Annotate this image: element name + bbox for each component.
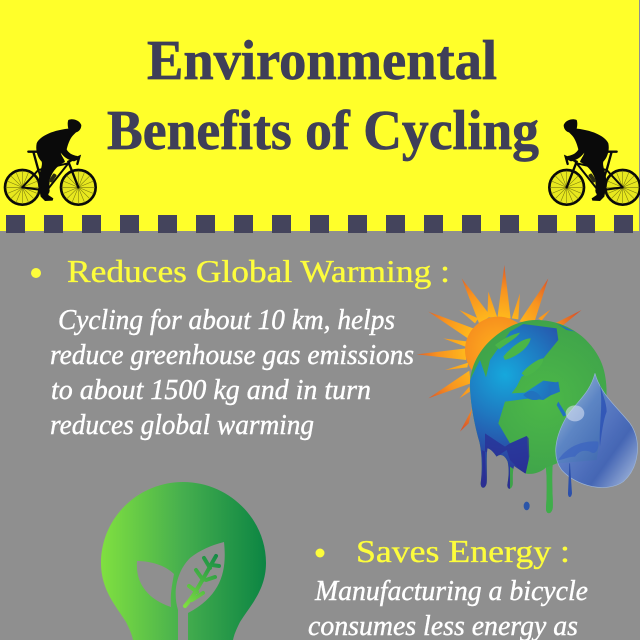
icon: left cyclist <box>5 119 96 205</box>
melting globe body <box>467 317 610 520</box>
detached drip <box>524 502 530 510</box>
icon: green light bulb with leaves <box>101 482 266 640</box>
text block: global warming description: reduces global warming <box>50 410 314 441</box>
sun rays <box>417 265 582 432</box>
title: Environmental <box>147 30 497 92</box>
icon: right cyclist <box>549 119 640 205</box>
text block: global warming description: to about 1500 kg and in turn <box>51 375 371 406</box>
yellow header band <box>0 0 639 231</box>
drop refraction <box>600 383 607 447</box>
water drop <box>556 373 637 488</box>
checkered road strip <box>6 215 633 233</box>
heading: saves energy: Saves Energy : <box>356 533 570 569</box>
left leaf <box>137 561 174 607</box>
heading: reduces global warming: Reduces Global Warming : <box>67 253 450 289</box>
title <box>107 30 539 162</box>
leaf vein <box>185 556 219 606</box>
melt shadow <box>482 433 529 493</box>
oceans <box>468 324 558 493</box>
text block: global warming description: reduce greenhouse gas emissions <box>50 340 414 371</box>
bulb <box>101 482 266 640</box>
right leaf <box>176 542 225 640</box>
text block: saves energy description <box>308 576 588 640</box>
continents <box>495 333 543 377</box>
text block: global warming description <box>50 305 414 441</box>
title: Benefits of Cycling <box>107 100 539 162</box>
text block: saves energy description: Manufacturing a bicycle <box>314 576 588 607</box>
text block: global warming description: Cycling for about 10 km, helps <box>58 305 395 336</box>
icon: melting globe with sun and water drop <box>417 265 637 520</box>
